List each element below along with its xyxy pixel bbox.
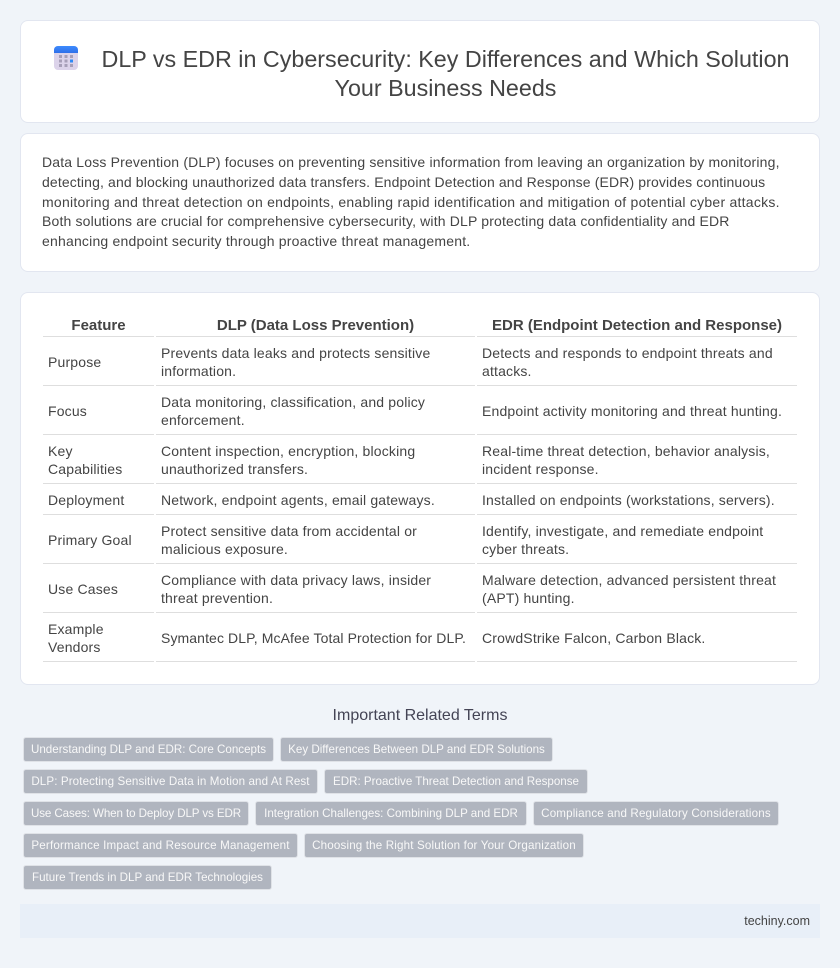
panel: intro (20, 133, 820, 272)
row: primary goal: Identify, investigate, and remediate endpoint (482, 523, 763, 539)
header: EDR: EDR (Endpoint Detection and Response) (492, 317, 782, 334)
header: feature: Feature (71, 317, 126, 334)
row: example vendors: Vendors (48, 639, 101, 655)
tag: Use Cases: When to Deploy DLP vs EDR (31, 807, 241, 820)
row: example vendors: CrowdStrike Falcon, Carbon Black. (482, 630, 705, 646)
intro text: Data Loss Prevention (DLP) focuses on preventing sensitive information from leaving an organization by monitoring, (42, 154, 780, 170)
tag (324, 769, 588, 794)
row: focus (48, 394, 782, 428)
title: Your Business Needs (335, 75, 556, 101)
row: example vendors: Example (48, 621, 104, 637)
row: purpose: attacks. (482, 363, 532, 379)
tag (23, 865, 272, 890)
row: example vendors (48, 621, 705, 655)
row: deployment (48, 492, 775, 508)
tag (304, 833, 584, 858)
tag (23, 801, 249, 826)
tag (255, 801, 527, 826)
row: key capabilities: Content inspection, encryption, blocking (161, 443, 415, 459)
header: DLP: DLP (Data Loss Prevention) (217, 317, 414, 334)
icon: calendar (54, 46, 78, 70)
table content (43, 317, 797, 662)
tag: Understanding DLP and EDR: Core Concepts (31, 743, 266, 756)
tag (23, 769, 318, 794)
intro text (42, 154, 780, 249)
title: DLP vs EDR in Cybersecurity: Key Differences and Which Solution (102, 46, 790, 72)
tag: Key Differences Between DLP and EDR Solutions (288, 743, 545, 756)
footer source: techiny.com (744, 914, 810, 928)
row: primary goal (48, 523, 764, 557)
row: purpose: Prevents data leaks and protects sensitive (161, 345, 430, 361)
tag (23, 737, 274, 762)
row: key capabilities: incident response. (482, 461, 599, 477)
row: deployment: Deployment (48, 492, 124, 508)
row: use cases: threat prevention. (161, 590, 273, 606)
row: key capabilities: Capabilities (48, 461, 122, 477)
row: primary goal: Primary Goal (48, 532, 132, 548)
row: use cases: Compliance with data privacy laws, insider (161, 572, 431, 588)
row: key capabilities: unauthorized transfers. (161, 461, 308, 477)
row: use cases: Use Cases (48, 581, 118, 597)
row: key capabilities: Key (48, 443, 73, 459)
row: focus: Endpoint activity monitoring and threat hunting. (482, 403, 782, 419)
row: use cases (48, 572, 776, 606)
tag: Compliance and Regulatory Considerations (541, 807, 771, 820)
row: purpose (48, 345, 773, 379)
title (102, 46, 790, 101)
row: purpose: Detects and responds to endpoint threats and (482, 345, 773, 361)
related terms tags (23, 737, 779, 890)
tag: DLP: Protecting Sensitive Data in Motion and At Rest (31, 775, 310, 788)
row: deployment: Network, endpoint agents, email gateways. (161, 492, 435, 508)
row: purpose: information. (161, 363, 236, 379)
related terms heading: Important Related Terms (333, 707, 507, 724)
row: focus: enforcement. (161, 412, 245, 428)
row: use cases: Malware detection, advanced persistent threat (482, 572, 776, 588)
header card (20, 20, 820, 123)
row: example vendors: Symantec DLP, McAfee Total Protection for DLP. (161, 630, 466, 646)
tag (280, 737, 553, 762)
intro text: detecting, and blocking unauthorized data transfers. Endpoint Detection and Response (EDR) provides continuous (42, 174, 765, 190)
panel: comparison table (20, 292, 820, 685)
tag: Performance Impact and Resource Management (31, 839, 290, 852)
intro text: enhancing endpoint security through proactive threat management. (42, 233, 470, 249)
tag (23, 833, 298, 858)
row: primary goal: malicious exposure. (161, 541, 288, 557)
footer bar (20, 904, 820, 938)
tag: EDR: Proactive Threat Detection and Response (333, 775, 579, 788)
row: use cases: (APT) hunting. (482, 590, 575, 606)
row: purpose: Purpose (48, 354, 101, 370)
tag (533, 801, 779, 826)
tag: Integration Challenges: Combining DLP and EDR (264, 807, 518, 820)
intro text: monitoring and threat detection on endpoints, enabling rapid identification and mitigation of potential cyber attacks. (42, 194, 780, 210)
row: primary goal: cyber threats. (482, 541, 569, 557)
row: deployment: Installed on endpoints (workstations, servers). (482, 492, 775, 508)
row: key capabilities (48, 443, 770, 477)
row: key capabilities: Real-time threat detection, behavior analysis, (482, 443, 770, 459)
intro text: Both solutions are crucial for comprehensive cybersecurity, with DLP protecting data confidentiality and EDR (42, 213, 730, 229)
row: focus: Data monitoring, classification, and policy (161, 394, 425, 410)
tag: Future Trends in DLP and EDR Technologies (32, 871, 263, 884)
tag: Choosing the Right Solution for Your Organization (312, 839, 576, 852)
row: primary goal: Protect sensitive data from accidental or (161, 523, 417, 539)
row: focus: Focus (48, 403, 87, 419)
